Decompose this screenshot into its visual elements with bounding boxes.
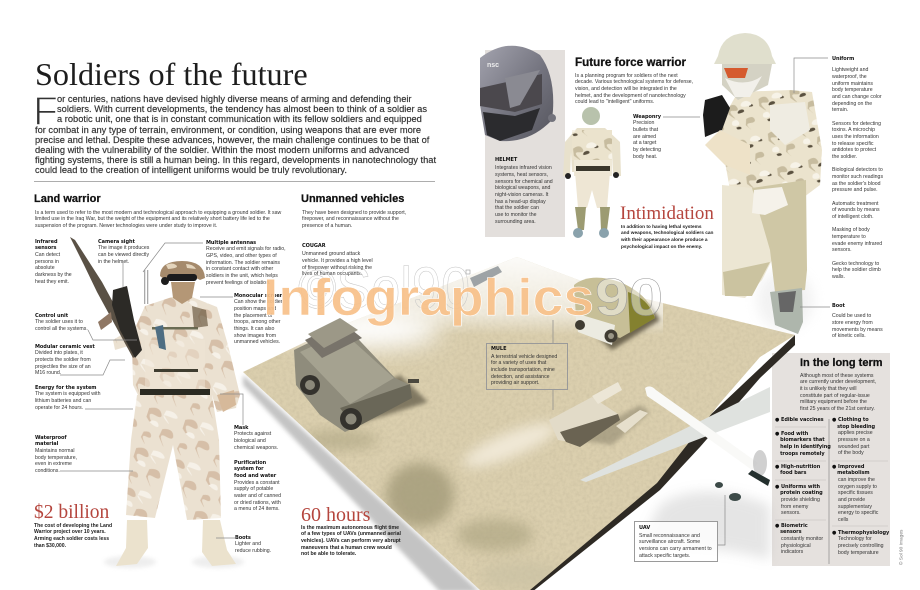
label: energy for the system: The system is equipped with bbox=[35, 391, 100, 397]
label: boot: movements by means bbox=[832, 327, 883, 333]
stat: 2 billion: $2 billion bbox=[34, 502, 109, 523]
label: multiple antennas: Multiple antennas bbox=[206, 240, 256, 246]
intro text bbox=[35, 94, 436, 176]
label: monocular screen: things. It can also bbox=[234, 326, 274, 332]
text: land warrior intro: limited use in the Iraq War, but the weight of the equipment and its relatively short battery life led to the bbox=[35, 216, 270, 222]
label: uniform: as the soldier's blood bbox=[832, 181, 881, 187]
list: left column: troops remotely bbox=[780, 451, 825, 457]
label: cougar: lives of human occupants. bbox=[302, 271, 362, 277]
label: uniform: of wounds by means bbox=[832, 207, 880, 213]
label: camera sight: The image it produces bbox=[98, 245, 149, 251]
label: uniform: of intelligent cloth. bbox=[832, 214, 874, 220]
label: infrared sensors: persons in bbox=[35, 259, 59, 265]
label: monocular screen: show images from bbox=[234, 333, 276, 339]
figure: kneeling future force soldier bbox=[703, 33, 822, 334]
list: right column: energy to specific bbox=[838, 510, 878, 516]
text: long term intro: are currently under development, bbox=[800, 379, 876, 385]
text: 60 hours detail: vehicles). UAVs can perform very abrupt bbox=[301, 538, 401, 544]
list: left column: ● Edible vaccines bbox=[775, 417, 824, 423]
label: infrared sensors: Can detect bbox=[35, 252, 60, 258]
vehicle: mule tracked robot bbox=[549, 382, 650, 447]
label: helmet bbox=[495, 156, 553, 225]
label: camera sight: in the helmet. bbox=[98, 259, 129, 265]
text: long term intro: first 25 years of the 21st century. bbox=[800, 406, 875, 412]
list: left column: help in identifying bbox=[780, 444, 831, 450]
text: land warrior intro: Is a term used to refer to the most modern and technological approach to equipping a ground soldier. It saw bbox=[35, 210, 281, 216]
list: left column: from enemy bbox=[781, 504, 808, 510]
text: mule: detection, and assistance bbox=[491, 374, 550, 380]
list: right column: precisely controlling bbox=[838, 543, 884, 549]
label: uniform: pressure and pulse. bbox=[832, 187, 878, 193]
label: monocular screen: Monocular screen bbox=[234, 292, 283, 298]
label: uniform: Masking of body bbox=[832, 227, 870, 233]
label: uniform: and can change color bbox=[832, 94, 882, 100]
label: mask bbox=[234, 424, 278, 451]
list: left column: provide shielding bbox=[781, 497, 820, 503]
label: multiple antennas: prevent feelings of isolation. bbox=[206, 280, 270, 286]
label: multiple antennas bbox=[206, 240, 286, 286]
label: camera sight: can be viewed directly bbox=[98, 252, 149, 258]
label: purification system: system for bbox=[234, 466, 264, 472]
panel: in the long term background bbox=[772, 353, 890, 566]
figure: future force small soldier bbox=[563, 107, 621, 238]
label: boot bbox=[832, 302, 883, 339]
list: right column: can improve the bbox=[838, 477, 875, 483]
heading: unmanned vehicles: Unmanned vehicles bbox=[301, 193, 404, 205]
list: right column: body temperature bbox=[838, 550, 879, 556]
text: mule: A terrestrial vehicle designed bbox=[491, 354, 557, 360]
panel: helmet background bbox=[485, 50, 565, 237]
label: uniform: uses the information bbox=[832, 134, 879, 140]
list: left column: physiological bbox=[781, 543, 811, 549]
text: uav bbox=[639, 524, 712, 559]
label: helmet: surrounding area. bbox=[495, 219, 536, 225]
label: helmet: Integrates infrared vision bbox=[495, 165, 552, 171]
list: right column: ● Thermophysiology bbox=[832, 530, 889, 536]
list: right column: cells bbox=[838, 517, 848, 523]
label: boot: Could be used to bbox=[832, 313, 871, 319]
list: right column: applies precise bbox=[838, 430, 873, 436]
label: camera sight: Camera sight bbox=[98, 238, 135, 244]
vehicle: rear hill gun bbox=[466, 266, 502, 287]
text: intimidation detail: with their appearance alone produce a bbox=[621, 238, 708, 243]
label: boots: Lighter and bbox=[235, 541, 261, 547]
label: purification system: supply of potable bbox=[234, 486, 273, 492]
label: helmet: night-vision cameras. It bbox=[495, 192, 548, 198]
text: long term intro: it is unlikely that they will bbox=[800, 386, 857, 392]
label: cougar: COUGAR bbox=[302, 242, 326, 248]
stat: 60 hours: 60 hours bbox=[301, 504, 370, 526]
text: unmanned intro: firepower, and reconnaissance without the bbox=[302, 216, 399, 222]
label: cougar bbox=[302, 242, 373, 277]
label: waterproof material: material bbox=[35, 441, 58, 447]
label: uniform: sensors. bbox=[832, 247, 852, 253]
list: right column: and provide bbox=[838, 497, 865, 503]
list: right column: oxygen supply to bbox=[838, 484, 877, 490]
text: uav: Small reconnaissance and bbox=[639, 533, 700, 539]
heading: land warrior: Land warrior bbox=[34, 193, 101, 205]
label: boots: reduce rubbing. bbox=[235, 548, 271, 554]
title: Soldiers of the future bbox=[35, 56, 308, 92]
label: waterproof material: even in extreme bbox=[35, 461, 72, 467]
list: left column: constantly monitor bbox=[781, 536, 823, 542]
label: uniform: Uniform bbox=[832, 56, 854, 62]
label: weaponry bbox=[633, 114, 661, 160]
intro text: fighting systems, there is still a human being. In this regard, developments in nanotechnology that bbox=[35, 155, 436, 165]
label: weaponry: Weaponry bbox=[633, 114, 661, 120]
credit: © Sol 90 Images bbox=[900, 530, 905, 565]
label: modular ceramic vest: projectiles the size of an bbox=[35, 364, 91, 370]
label: purification system: a menu of 24 items. bbox=[234, 506, 280, 512]
list: left column: ● Food with bbox=[775, 430, 808, 436]
list: right column: Technology for bbox=[838, 536, 872, 542]
label: helmet: HELMET bbox=[495, 156, 517, 162]
label: purification system: Purification bbox=[234, 460, 266, 466]
box: uav bbox=[634, 521, 718, 562]
text: uav: versions can carry armament to bbox=[639, 546, 712, 552]
text: unmanned intro: presence of a human. bbox=[302, 223, 352, 229]
figure: land warrior soldier bbox=[70, 237, 244, 568]
watermark: 90 bbox=[595, 269, 663, 327]
callout lines bbox=[60, 58, 888, 564]
label: uniform: walls. bbox=[832, 274, 845, 280]
heading: future force warrior: Future force warrior bbox=[575, 56, 686, 69]
label: waterproof material: conditions. bbox=[35, 468, 60, 474]
list: right column: wounded part bbox=[838, 444, 869, 450]
text: mule: providing air support. bbox=[491, 380, 539, 386]
intro text: dealing with the vulnerability of the soldier. Within the most modern uniforms and advanced bbox=[35, 145, 409, 155]
list: left column bbox=[775, 417, 831, 555]
text: mule bbox=[491, 346, 557, 386]
label: mask: biological and bbox=[234, 438, 266, 444]
label: uniform: uniform maintains bbox=[832, 81, 873, 87]
label: helmet: has a head-up display bbox=[495, 199, 546, 205]
text: mule: for a variety of uses that bbox=[491, 360, 546, 366]
list: left column: sensors bbox=[780, 529, 802, 535]
text: land warrior intro: suspension of the program. Newer technologies were under study to improve it. bbox=[35, 223, 217, 229]
text: cost of land warrior: The cost of developing the Land bbox=[34, 522, 112, 528]
text: intimidation detail: In addition to having lethal systems bbox=[621, 224, 702, 230]
label: uniform: depending on the bbox=[832, 101, 872, 107]
label: weaponry: bullets that bbox=[633, 127, 658, 133]
label: purification system bbox=[234, 460, 281, 512]
label: camera sight bbox=[98, 238, 150, 265]
list: left column: sensors. bbox=[781, 510, 801, 516]
label: weaponry: Precision bbox=[633, 120, 654, 126]
label: waterproof material bbox=[35, 434, 77, 474]
label: infrared sensors: Infrared bbox=[35, 238, 57, 244]
label: uniform: terrain. bbox=[832, 107, 848, 113]
list: right column: metabolism bbox=[837, 470, 870, 476]
label: uniform: Biological detectors to bbox=[832, 167, 883, 173]
label: uniform: Gecko technology to bbox=[832, 261, 879, 267]
vehicle: green wheeled bbox=[574, 278, 660, 350]
text: long term intro: constitute part of regular-issue bbox=[800, 393, 870, 399]
text: intimidation detail: and weapons, technological soldiers can bbox=[621, 231, 713, 236]
label: waterproof material: Waterproof bbox=[35, 434, 67, 440]
text: long term intro: Although most of these systems bbox=[800, 372, 874, 378]
list: left column: food bars bbox=[780, 470, 806, 476]
text: land warrior intro bbox=[35, 210, 282, 229]
text: intimidation detail bbox=[621, 224, 714, 250]
label: weaponry: body heat. bbox=[633, 154, 657, 160]
label: modular ceramic vest: Modular ceramic vest bbox=[35, 344, 95, 350]
label: control unit bbox=[35, 312, 88, 332]
label: modular ceramic vest: Divided into plates, it bbox=[35, 350, 83, 356]
label: energy for the system bbox=[35, 384, 100, 411]
label: modular ceramic vest: M16 round. bbox=[35, 370, 61, 376]
text: unmanned intro bbox=[302, 210, 406, 229]
label: cougar: vehicle. It provides a high level bbox=[302, 258, 373, 264]
list: right column: ● Clothing to bbox=[832, 417, 869, 423]
text: cost of land warrior: than $30,000. bbox=[34, 543, 66, 549]
label: boot: store energy from bbox=[832, 320, 873, 326]
label: uniform: toxins. A microchip bbox=[832, 127, 875, 133]
text: 60 hours detail: Is the maximum autonomous flight time bbox=[301, 524, 399, 530]
label: waterproof material: body temperature, bbox=[35, 455, 77, 461]
label: boots: Boots bbox=[235, 534, 251, 540]
list: left column: ● Biometric bbox=[775, 522, 808, 528]
intro text: a robotic unit, one that is in constant communication with its fellow soldiers and equipped bbox=[57, 114, 422, 124]
label: monocular screen bbox=[234, 292, 283, 345]
label: monocular screen: the placement of bbox=[234, 313, 272, 319]
text: future force intro: Is a planning program for soldiers of the next bbox=[575, 72, 678, 78]
label: multiple antennas: GPS, video, and other types of bbox=[206, 253, 277, 259]
intro text: precise and lethal. Despite these advances, however, the main challenge continues to be that of bbox=[35, 135, 429, 145]
label: weaponry: by detecting bbox=[633, 147, 661, 153]
watermark: Infographics bbox=[263, 269, 594, 327]
label: helmet: sensors for chemical and bbox=[495, 179, 553, 185]
label: boot: Boot bbox=[832, 302, 845, 308]
text: uav: UAV bbox=[639, 524, 650, 530]
watermark: ©Sol90 bbox=[298, 256, 470, 321]
label: monocular screen: position maps and bbox=[234, 306, 276, 312]
text: future force intro bbox=[575, 72, 693, 105]
label: mask: Mask bbox=[234, 424, 248, 430]
text: cost of land warrior: Warrior project over 10 years. bbox=[34, 529, 106, 535]
text: uav: attack specific targets. bbox=[639, 553, 690, 559]
intro text: for combat in any type of terrain, environment, or condition, using weapons that are ever more bbox=[35, 125, 421, 135]
label: mask: Protects against bbox=[234, 431, 271, 437]
label: multiple antennas: in constant contact with other bbox=[206, 266, 273, 272]
list: right column: stop bleeding bbox=[837, 424, 875, 430]
text: future force intro: decade. Various technological systems for defense, bbox=[575, 79, 693, 85]
list: left column: ● Uniforms with bbox=[775, 484, 820, 490]
list: left column: ● High-nutrition bbox=[775, 464, 820, 470]
list: left column: protein coating bbox=[780, 490, 823, 496]
list: left column: biomarkers that bbox=[780, 437, 825, 443]
drop cap: F bbox=[33, 88, 58, 134]
text: 60 hours detail bbox=[301, 524, 401, 557]
text: long term intro: military equipment before the bbox=[800, 399, 867, 405]
label: uniform: the soldier. bbox=[832, 154, 857, 160]
label: cougar: Unmanned ground attack bbox=[302, 251, 360, 257]
text: long term intro bbox=[800, 372, 876, 412]
rule under intro bbox=[34, 180, 435, 183]
text: unmanned intro: They have been designed to provide support, bbox=[302, 210, 406, 216]
label: control unit: control all the systems. bbox=[35, 326, 88, 332]
label: helmet: biological weapons, and bbox=[495, 185, 550, 191]
text: future force intro: vision, and detection will be integrated in the bbox=[575, 86, 677, 92]
label: purification system: or dried rations, with bbox=[234, 500, 281, 506]
list: right column: ● Improved bbox=[832, 464, 864, 470]
label: monocular screen: Can show the soldier bbox=[234, 299, 282, 305]
heading: in the long term: In the long term bbox=[800, 357, 882, 369]
text: 60 hours detail: of a few types of UAVs (unmanned aerial bbox=[301, 531, 401, 537]
label: weaponry: are aimed bbox=[633, 134, 656, 140]
list: right column bbox=[832, 417, 890, 556]
label: modular ceramic vest: protects the soldier from bbox=[35, 357, 91, 363]
label: boot: of kinetic cells. bbox=[832, 333, 866, 339]
label: multiple antennas: soldiers in the unit, which helps bbox=[206, 273, 278, 279]
label: modular ceramic vest bbox=[35, 344, 95, 376]
label: helmet: use to monitor the bbox=[495, 212, 537, 218]
label: multiple antennas: Receive and emit signals for radio, bbox=[206, 246, 286, 252]
label: uniform: evade enemy infrared bbox=[832, 241, 882, 247]
box: mule bbox=[486, 343, 568, 390]
heading: intimidation: Intimidation bbox=[620, 203, 714, 224]
label: uniform: Lightweight and bbox=[832, 67, 868, 73]
text: future force intro: could lead to "intelligent" uniforms. bbox=[575, 99, 654, 105]
intro text: or centuries, nations have devised highly diverse means of arming and defending their bbox=[57, 94, 412, 104]
label: cougar: of firepower without risking the bbox=[302, 265, 372, 271]
label: monocular screen: troops, among other bbox=[234, 319, 280, 325]
photo: helmet: nsc bbox=[487, 62, 499, 69]
text: uav: surveillance aircraft. Some bbox=[639, 539, 700, 545]
label: monocular screen: unmanned vehicles. bbox=[234, 339, 280, 345]
photo: helmet bbox=[480, 46, 556, 141]
list: right column: supplementary bbox=[838, 504, 872, 510]
label: energy for the system: Energy for the system bbox=[35, 384, 96, 390]
label: control unit: Control unit bbox=[35, 312, 68, 318]
text: intimidation detail: psychological impact on the enemy. bbox=[621, 245, 702, 250]
text: 60 hours detail: not be able to tolerate. bbox=[301, 551, 356, 557]
text: cost of land warrior bbox=[34, 522, 112, 549]
label: energy for the system: lithium batteries and can bbox=[35, 398, 91, 404]
label: infrared sensors: sensors bbox=[35, 245, 56, 251]
label: uniform: waterproof, the bbox=[832, 74, 867, 80]
label: uniform: to release specific bbox=[832, 141, 874, 147]
text: mule: MULE bbox=[491, 346, 506, 352]
label: weaponry: at a target bbox=[633, 140, 656, 146]
vehicle: UAV bbox=[580, 386, 770, 560]
list: left column: indicators bbox=[781, 549, 803, 555]
label: helmet: that the soldier can bbox=[495, 205, 539, 211]
label: uniform: monitor such readings bbox=[832, 174, 883, 180]
list: right column: of the body bbox=[838, 450, 864, 456]
label: waterproof material: Maintains normal bbox=[35, 448, 74, 454]
label: infrared sensors: absolute bbox=[35, 265, 55, 271]
label: energy for the system: operate for 24 hours. bbox=[35, 405, 83, 411]
label: multiple antennas: information. The soldier remains bbox=[206, 260, 280, 266]
label: infrared sensors: darkness by the bbox=[35, 272, 72, 278]
label: uniform: body temperature bbox=[832, 87, 873, 93]
label: infrared sensors: heat they emit. bbox=[35, 279, 69, 285]
label: uniform: help the soldier climb bbox=[832, 267, 881, 273]
text: cost of land warrior: Arming each soldier costs less bbox=[34, 536, 109, 542]
label: uniform: antidotes to protect bbox=[832, 147, 876, 153]
terrain diorama bbox=[243, 250, 795, 590]
label: control unit: The soldier uses it to bbox=[35, 319, 83, 325]
text: 60 hours detail: maneuvers that a human crew would bbox=[301, 545, 392, 551]
vehicle: cougar bbox=[294, 318, 428, 432]
label: uniform: temperature to bbox=[832, 234, 866, 240]
label: helmet: systems, heat sensors, bbox=[495, 172, 548, 178]
list: right column: pressure on a bbox=[838, 437, 870, 443]
label: mask: chemical weapons. bbox=[234, 445, 278, 451]
label: purification system: Provides a constant bbox=[234, 480, 280, 486]
text: mule: include transportation, mine bbox=[491, 367, 555, 373]
intro text: soldiers. With current developments, the tendency has almost been to think of a soldier as bbox=[57, 104, 427, 114]
label: boots bbox=[235, 534, 271, 554]
label: infrared sensors bbox=[35, 238, 72, 285]
label: purification system: food and water bbox=[234, 473, 276, 479]
intro text: could lead to the creation of intelligent uniforms would be truly revolutionary. bbox=[35, 165, 347, 175]
label: uniform bbox=[832, 56, 883, 280]
label: uniform: Automatic treatment bbox=[832, 201, 878, 207]
label: uniform: Sensors for detecting bbox=[832, 121, 881, 127]
label: purification system: water and of canned bbox=[234, 493, 281, 499]
list: right column: specific tissues bbox=[838, 490, 873, 496]
text: future force intro: helmet, and the development of nanotechnology bbox=[575, 93, 686, 99]
